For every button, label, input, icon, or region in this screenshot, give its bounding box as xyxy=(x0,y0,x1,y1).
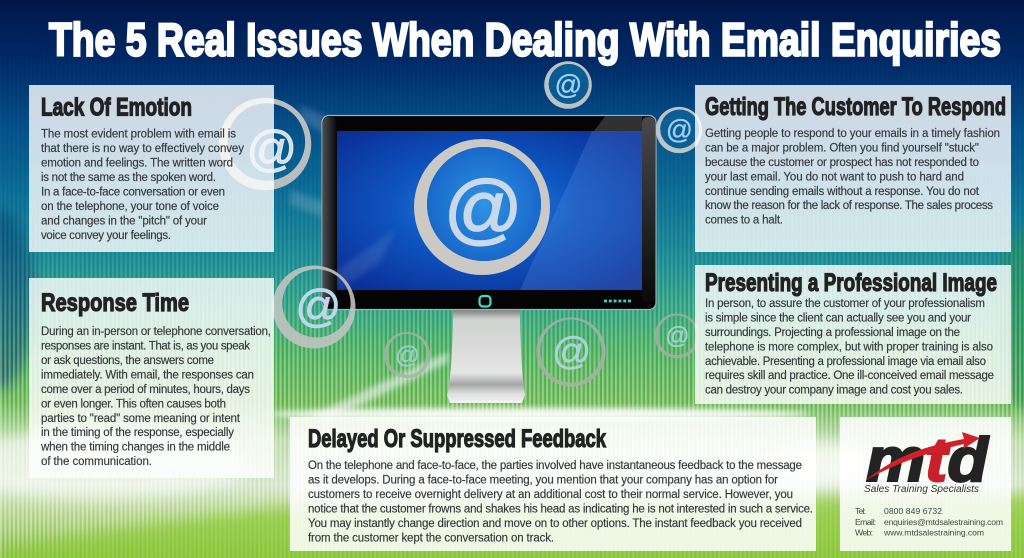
icon: main at sign: @ xyxy=(442,164,522,252)
text: response time body: or even longer. This often causes both xyxy=(41,398,226,410)
text: presenting a professional image body: In person, to assure the customer of your professionalism xyxy=(705,298,985,310)
icon: red swoosh arrow xyxy=(865,432,980,481)
contact details: www.mtdsalestraining.com xyxy=(883,528,984,538)
bezel right side xyxy=(642,117,655,302)
contact details: enquiries@mtdsalestraining.com xyxy=(884,517,1003,527)
text: getting the customer to respond body: comes to a halt. xyxy=(705,215,783,227)
icon: at sign circle right low: @ xyxy=(665,323,689,350)
icon: at sign circle top xyxy=(544,61,592,109)
icon: at sign circle small bottom: @ xyxy=(395,342,419,369)
text: lack of emotion body: is not the same as the spoken word. xyxy=(41,172,216,184)
text: presenting a professional image body: can destroy your company image and cost you sales. xyxy=(705,385,963,397)
logo: mtd: mtd xyxy=(866,426,989,495)
text: getting the customer to respond body: know the reason for the lack of response. The sales process xyxy=(705,200,993,212)
icon: at sign circle left low xyxy=(273,266,355,348)
panel: response time xyxy=(29,278,274,478)
text: response time body: of the communication. xyxy=(41,456,152,468)
panel: lack of emotion xyxy=(29,85,274,252)
icon: monitor stand xyxy=(447,310,525,403)
icon: at sign circle right low xyxy=(655,314,699,358)
icon: at sign circle right top xyxy=(656,107,702,153)
text: presenting a professional image body: requires skill and practice. One ill-conceived email message xyxy=(705,370,994,382)
icon: indicator dots xyxy=(604,300,632,302)
monitor screen xyxy=(337,131,642,290)
text: delayed or suppressed feedback body xyxy=(308,460,813,544)
text: lack of emotion body: The most evident problem with email is xyxy=(41,128,236,140)
light streaks behind monitor xyxy=(290,105,345,218)
text: lack of emotion body xyxy=(41,128,244,242)
icon: at sign circle medium bottom: @ xyxy=(551,330,591,373)
screen left streak xyxy=(337,230,395,290)
text: presenting a professional image body: surroundings. Projecting a professional image on the xyxy=(705,327,960,339)
text: getting the customer to respond body: Getting people to respond to your emails in a timely fashion xyxy=(705,128,1000,140)
text: getting the customer to respond body: continue sending emails without a response. You do not xyxy=(705,186,980,198)
text: lack of emotion body: on the telephone, your tone of voice xyxy=(41,201,219,213)
monitor bezel xyxy=(322,116,656,310)
tagline: Sales Training Specialists xyxy=(864,484,979,495)
text: presenting a professional image body xyxy=(705,298,994,397)
text: getting the customer to respond body xyxy=(705,128,1000,227)
bezel left side xyxy=(323,117,337,302)
text: delayed or suppressed feedback body: You may instantly change direction and move on to other options. The instant feedback you received xyxy=(308,518,802,530)
monitor xyxy=(322,116,656,403)
contact details: Web: xyxy=(855,528,873,538)
bezel glare xyxy=(594,116,642,131)
icon: at sign circle right top: @ xyxy=(666,115,692,144)
text: lack of emotion body: and changes in the "pitch" of your xyxy=(41,215,207,227)
text: delayed or suppressed feedback body: notice that the customer frowns and shakes his head as indicating he is not interested in such a service. xyxy=(308,503,813,515)
text: lack of emotion body: In a face-to-face conversation or even xyxy=(41,186,225,198)
text: presenting a professional image body: telephone is more complex, but with proper training is also xyxy=(705,341,993,353)
heading: response time: Response Time xyxy=(41,289,189,317)
icon: at sign circle medium bottom xyxy=(536,317,606,387)
text: response time body: come over a period of minutes, hours, days xyxy=(41,384,250,396)
panel: getting the customer to respond xyxy=(695,85,1011,252)
heading: lack of emotion: Lack Of Emotion xyxy=(41,94,192,122)
icon: ring of left large circle xyxy=(219,98,311,190)
icon: power button xyxy=(480,296,490,306)
icon: main at sign xyxy=(414,139,550,275)
text: delayed or suppressed feedback body: as it develops. During a face-to-face meeting, you mention that your company has an option for xyxy=(308,474,778,486)
text: delayed or suppressed feedback body: On the telephone and face-to-face, the parties involved have instantaneous feedback to the message xyxy=(308,460,802,472)
screen glare xyxy=(520,131,642,290)
text: getting the customer to respond body: because the customer or prospect has not responded to xyxy=(705,157,979,169)
icon: at sign of left large circle: @ xyxy=(246,121,296,177)
panel: delayed or suppressed feedback xyxy=(290,417,816,551)
text: lack of emotion body: that there is no way to effectively convey xyxy=(41,143,244,155)
text: response time body: During an in-person or telephone conversation, xyxy=(41,326,271,338)
text: response time body: or ask questions, the answers come xyxy=(41,355,214,367)
icon: at sign circle left low: @ xyxy=(295,281,341,332)
heading: delayed or suppressed feedback: Delayed Or Suppressed Feedback xyxy=(308,425,606,453)
text: delayed or suppressed feedback body: from the customer kept the conversation on track. xyxy=(308,532,554,544)
text: lack of emotion body: emotion and feelings. The written word xyxy=(41,158,233,170)
text: getting the customer to respond body: your last email. You do not want to push to hard and xyxy=(705,171,964,183)
text: response time body: in the timing of the response, especially xyxy=(41,427,234,439)
text: response time body xyxy=(40,326,271,468)
contact details xyxy=(855,506,1003,538)
text: getting the customer to respond body: can be a major problem. Often you find yourself "stuck" xyxy=(705,142,979,154)
contact details: Email: xyxy=(855,517,876,527)
contact details: 0800 849 6732 xyxy=(884,506,942,516)
text: presenting a professional image body: is simple since the client can actually see you and your xyxy=(705,312,971,324)
text: presenting a professional image body: achievable. Presenting a professional image via email also xyxy=(705,356,986,368)
panel: presenting a professional image xyxy=(695,265,1011,404)
text: response time body: immediately. With email, the responses can xyxy=(41,369,254,381)
text: delayed or suppressed feedback body: customers to receive overnight delivery at an additional cost to their normal service. However, you xyxy=(308,489,793,501)
contact details: Tel: xyxy=(855,506,866,516)
text: response time body: parties to "read" some meaning or intent xyxy=(41,413,241,425)
text: response time body: when the timing changes in the middle xyxy=(40,442,230,454)
icon: at sign circle top: @ xyxy=(554,69,582,100)
text: response time body: responses are instant. That is, as you speak xyxy=(41,340,250,352)
icon: at sign circle small bottom xyxy=(384,332,430,378)
panel: company logo and contact xyxy=(840,417,1011,551)
text: lack of emotion body: voice convey your feelings. xyxy=(41,230,171,242)
